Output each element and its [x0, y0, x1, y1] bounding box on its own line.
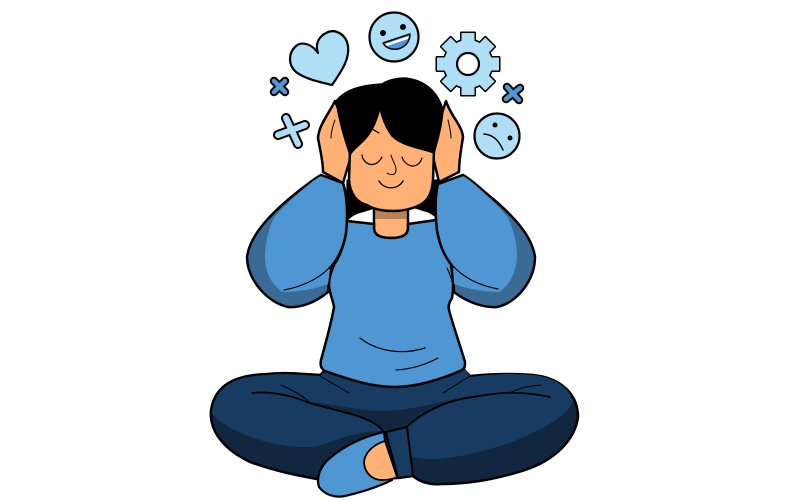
right cuff: [386, 427, 413, 478]
icon: sad face: [474, 114, 520, 158]
mouth: [379, 181, 403, 188]
right sleeve: [436, 175, 535, 307]
pants: [211, 366, 578, 484]
eyes: [362, 155, 422, 166]
icon: smiley face: [370, 12, 418, 62]
neck: [374, 200, 408, 238]
pants lit right leg: [398, 374, 573, 459]
icon: heart: [290, 31, 348, 85]
left knee line: [252, 393, 383, 431]
torso sweater: [321, 220, 465, 387]
nose: [387, 155, 396, 175]
icon: gear: [437, 33, 499, 95]
pants base: [211, 366, 578, 484]
icon: small cross right: [506, 87, 520, 100]
right hand: [432, 101, 463, 182]
hair back: [346, 180, 438, 221]
bare ankle: [364, 441, 397, 480]
icon: small cross left: [274, 81, 285, 92]
crotch shadow: [307, 394, 482, 431]
left hand: [318, 101, 352, 183]
foot: [318, 432, 397, 497]
hair front: [336, 78, 443, 155]
fold lines: [281, 376, 541, 401]
left sleeve: [247, 175, 347, 307]
icon: big cross: [278, 118, 305, 144]
right knee line: [407, 393, 550, 427]
face: [349, 105, 434, 211]
eyebrow strand: [372, 129, 379, 133]
sweater folds: [360, 338, 438, 370]
pants lit left leg: [212, 368, 470, 447]
